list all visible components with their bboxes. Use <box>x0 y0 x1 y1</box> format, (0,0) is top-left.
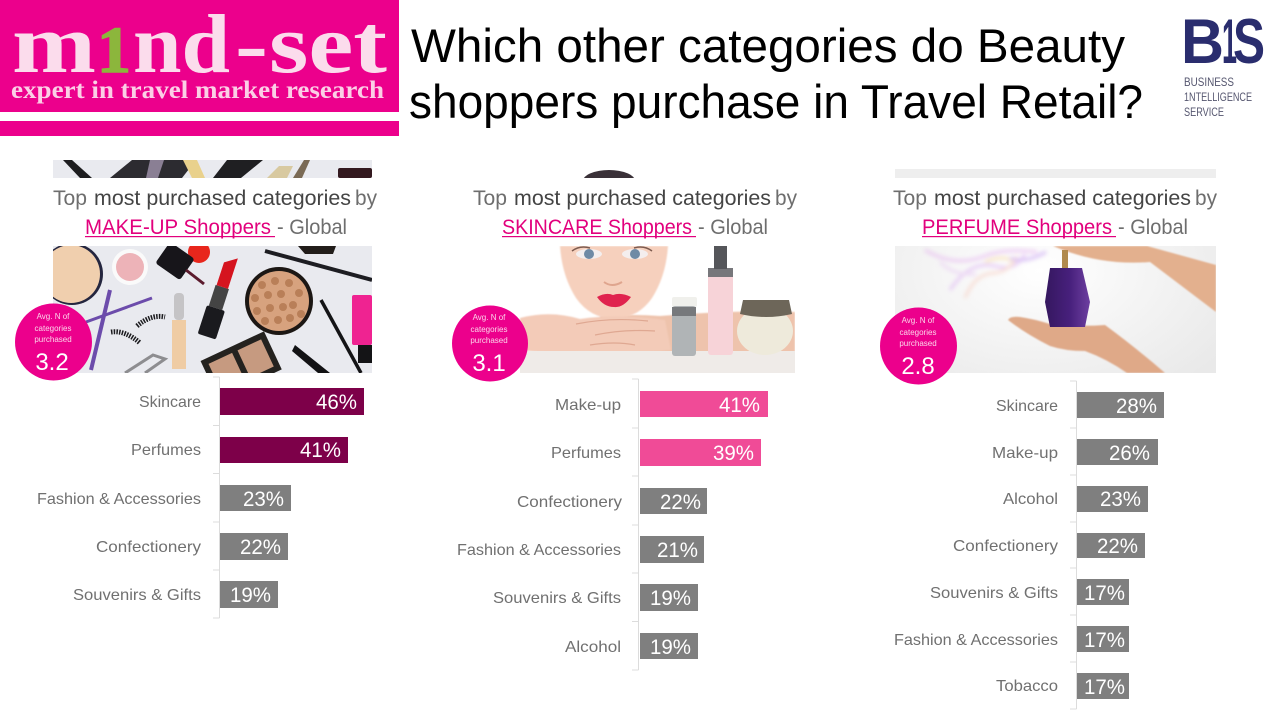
heading: perfume shoppers: PERFUME Shoppers <box>922 216 1112 239</box>
heading: make-up shoppers: Top <box>53 187 87 210</box>
bar: Alcohol 19%: Alcohol <box>565 639 621 656</box>
callout: average categories 2.8: categories <box>900 328 936 337</box>
bar: Souvenirs & Gifts 19%: Souvenirs & Gifts <box>73 587 201 604</box>
heading: make-up shoppers: by <box>355 187 377 210</box>
bar: Perfumes 41%: 41% <box>300 439 341 462</box>
bar: Make-up 41%: Make-up <box>555 397 621 414</box>
bar: Confectionery 22%: Confectionery <box>953 538 1058 555</box>
bar: Confectionery 22%: Confectionery <box>96 539 201 556</box>
bar: Skincare 28%: Skincare <box>996 398 1058 415</box>
heading: make-up shoppers: most purchased categories <box>94 187 351 210</box>
bar: Alcohol 23% <box>1003 486 1148 512</box>
logo: BIS business intelligence service: B <box>1181 7 1224 77</box>
photo: perfume bottle and hands <box>895 169 1216 373</box>
bar: Fashion & Accessories 17%: Fashion & Accessories <box>894 632 1058 649</box>
bar: Skincare 28% <box>996 392 1164 418</box>
title: shoppers purchase in Travel Retail? <box>409 75 1143 128</box>
panel: skincare shoppers <box>445 160 797 670</box>
bar: Perfumes 39% <box>551 439 761 466</box>
bar: Souvenirs & Gifts 19% <box>493 584 698 611</box>
panel: perfume shoppers <box>880 169 1217 709</box>
bar: Confectionery 22%: 22% <box>660 491 701 514</box>
callout: average categories 3.2 <box>15 304 92 380</box>
bar: Alcohol 19%: 19% <box>650 636 691 659</box>
logo: BIS business intelligence service: 1NTELLIGENCE <box>1184 90 1252 104</box>
photo: woman with skincare products <box>519 170 795 373</box>
bar: Fashion & Accessories 23%: 23% <box>243 488 284 511</box>
bar: Make-up 26% <box>992 439 1158 465</box>
logo: mind-set <box>0 0 399 136</box>
logo: mind-set: 1 <box>97 14 131 87</box>
bar: Tobacco 17% <box>996 673 1129 699</box>
bar: Souvenirs & Gifts 19%: 19% <box>230 584 271 607</box>
bar: Make-up 41% <box>555 391 768 417</box>
logo: mind-set: set <box>269 0 387 91</box>
bar: Skincare 46% <box>139 388 364 415</box>
callout: average categories 3.2: Avg. N of <box>37 312 70 321</box>
logo: mind-set: - <box>235 0 268 91</box>
heading: perfume shoppers <box>893 187 1217 239</box>
callout: average categories 3.2: 3.2 <box>35 349 69 376</box>
heading: skincare shoppers: Top <box>473 187 507 210</box>
heading: perfume shoppers: Top <box>893 187 927 210</box>
logo: mind-set: expert in travel market research <box>11 77 384 104</box>
bar: Perfumes 41% <box>131 437 348 463</box>
bar: Souvenirs & Gifts 17%: 17% <box>1084 582 1125 605</box>
logo: mind-set: m <box>12 0 96 91</box>
callout: average categories 3.1: 3.1 <box>472 350 506 377</box>
bar: Confectionery 22% <box>517 488 707 514</box>
bar: Perfumes 41%: Perfumes <box>131 442 201 459</box>
logo: BIS business intelligence service: S <box>1233 7 1265 77</box>
bar: Alcohol 19% <box>565 633 698 659</box>
heading: make-up shoppers: MAKE-UP Shoppers <box>85 216 271 239</box>
bar: Fashion & Accessories 21% <box>457 536 704 563</box>
logo: BIS business intelligence service: BUSINESS <box>1184 75 1234 89</box>
heading: skincare shoppers <box>473 187 797 239</box>
bar: Skincare 46%: 46% <box>316 391 357 414</box>
bar: Perfumes 39%: Perfumes <box>551 445 621 462</box>
heading: skincare shoppers: - Global <box>698 216 768 239</box>
logo: mind-set: nd <box>133 0 230 91</box>
bar chart: skincare shoppers <box>457 379 768 670</box>
bar: Souvenirs & Gifts 19% <box>73 581 278 608</box>
callout: average categories 2.8: 2.8 <box>901 353 935 380</box>
callout: average categories 3.2: categories <box>35 324 71 333</box>
logo: BIS business intelligence service: SERVICE <box>1184 105 1224 119</box>
bar: Make-up 26%: Make-up <box>992 445 1058 462</box>
bar: Make-up 41%: 41% <box>719 394 760 417</box>
heading: skincare shoppers: by <box>775 187 797 210</box>
logo: BIS business intelligence service: 1 <box>1222 7 1237 77</box>
bar: Confectionery 22%: Confectionery <box>517 494 622 511</box>
bar chart: make-up shoppers <box>37 377 364 618</box>
bar: Tobacco 17%: 17% <box>1084 676 1125 699</box>
callout: average categories 3.2: purchased <box>34 335 72 344</box>
bar: Alcohol 23%: Alcohol <box>1003 491 1058 508</box>
bar: Souvenirs & Gifts 17%: Souvenirs & Gifts <box>930 585 1058 602</box>
heading: skincare shoppers: most purchased categories <box>514 187 771 210</box>
callout: average categories 3.1: categories <box>471 325 507 334</box>
heading: make-up shoppers: - Global <box>277 216 347 239</box>
bar: Fashion & Accessories 21%: 21% <box>657 539 698 562</box>
bar: Fashion & Accessories 17%: 17% <box>1084 629 1125 652</box>
bar: Fashion & Accessories 23%: Fashion & Accessories <box>37 491 201 508</box>
bar: Confectionery 22% <box>953 533 1145 558</box>
bar: Fashion & Accessories 21%: Fashion & Accessories <box>457 542 621 559</box>
panel: make-up shoppers <box>15 160 377 618</box>
bar chart: perfume shoppers <box>894 381 1164 709</box>
bar: Make-up 26%: 26% <box>1109 442 1150 465</box>
callout: average categories 2.8: Avg. N of <box>902 316 935 325</box>
callout: average categories 2.8: purchased <box>899 339 937 348</box>
bar: Fashion & Accessories 23% <box>37 485 291 511</box>
bar: Confectionery 22%: 22% <box>1097 535 1138 558</box>
bar: Souvenirs & Gifts 19%: 19% <box>650 587 691 610</box>
bar: Souvenirs & Gifts 19%: Souvenirs & Gifts <box>493 590 621 607</box>
bar: Confectionery 22% <box>96 533 288 560</box>
heading: perfume shoppers: - Global <box>1118 216 1188 239</box>
bar: Tobacco 17%: Tobacco <box>996 678 1058 695</box>
callout: average categories 3.1: Avg. N of <box>473 313 506 322</box>
heading: perfume shoppers: by <box>1195 187 1217 210</box>
bar: Perfumes 39%: 39% <box>713 442 754 465</box>
bar: Alcohol 23%: 23% <box>1100 488 1141 511</box>
photo: cosmetics flat lay <box>53 160 372 373</box>
heading: perfume shoppers: most purchased categories <box>934 187 1191 210</box>
title: Which other categories do Beauty <box>411 19 1126 72</box>
bar: Souvenirs & Gifts 17% <box>930 579 1129 605</box>
callout: average categories 3.1: purchased <box>470 336 508 345</box>
logo: BIS business intelligence service <box>1181 7 1265 119</box>
heading: skincare shoppers: SKINCARE Shoppers <box>502 216 692 239</box>
callout: average categories 3.1 <box>452 306 528 382</box>
bar: Skincare 46%: Skincare <box>139 394 201 411</box>
title <box>409 19 1143 128</box>
bar: Fashion & Accessories 17% <box>894 626 1129 652</box>
callout: average categories 2.8 <box>880 308 957 384</box>
heading: make-up shoppers <box>53 187 377 239</box>
bar: Confectionery 22%: 22% <box>240 536 281 559</box>
bar: Skincare 28%: 28% <box>1116 395 1157 418</box>
